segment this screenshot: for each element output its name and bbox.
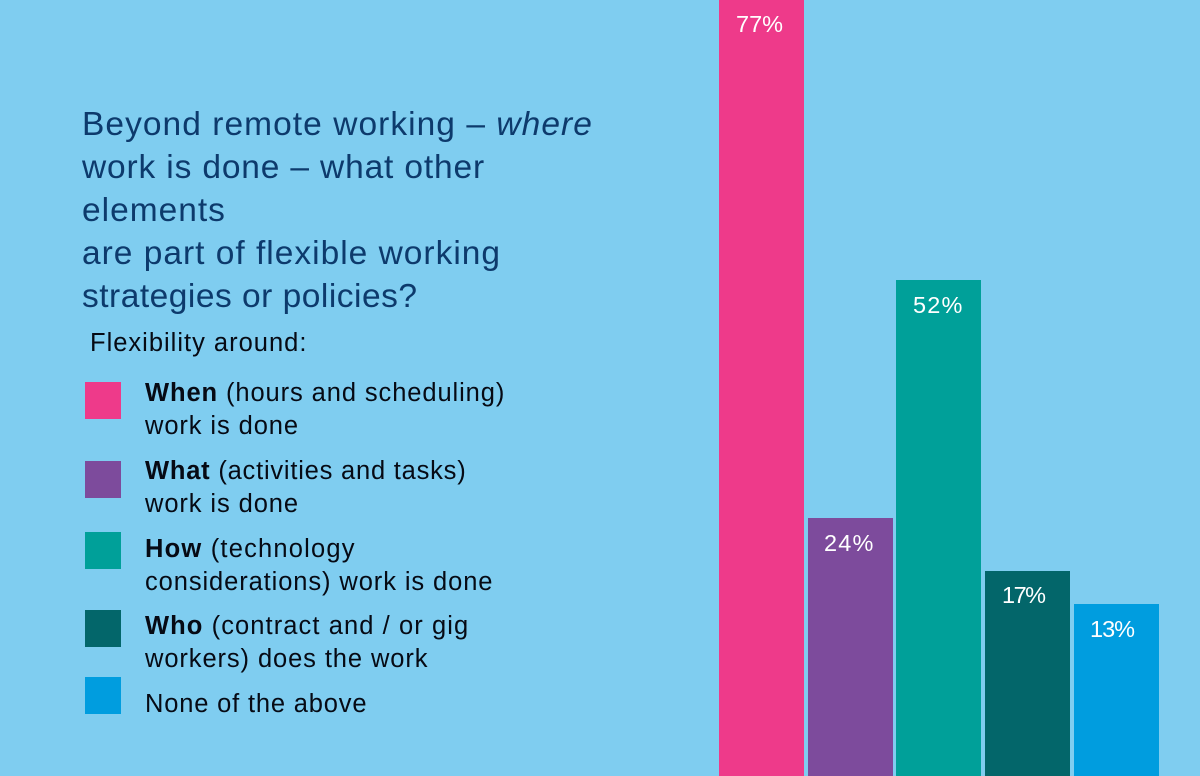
legend heading: Flexibility around: bbox=[90, 329, 307, 357]
bar: how 52%: 52% bbox=[913, 292, 964, 318]
bar: none 13%: 13% bbox=[1090, 616, 1134, 642]
legend item: how bbox=[85, 532, 493, 596]
bar: none 13% bbox=[1074, 604, 1159, 776]
legend item: how: considerations) work is done bbox=[145, 568, 493, 596]
legend item: how: How (technology bbox=[145, 535, 356, 563]
legend item: what: work is done bbox=[145, 490, 299, 518]
legend item: when bbox=[85, 379, 505, 440]
title: are part of flexible working bbox=[82, 235, 501, 272]
bar: who 17% bbox=[985, 571, 1070, 776]
bar: how 52% bbox=[896, 280, 981, 776]
legend item: none: None of the above bbox=[145, 690, 367, 718]
legend item: who bbox=[85, 610, 469, 673]
bar: when 77% bbox=[719, 0, 804, 776]
title: elements bbox=[82, 192, 226, 229]
bar chart bbox=[719, 0, 1159, 776]
legend item: what bbox=[85, 457, 466, 518]
legend item: what: What (activities and tasks) bbox=[145, 457, 466, 485]
legend item: when: When (hours and scheduling) bbox=[145, 379, 505, 407]
bar: who 17%: 17% bbox=[1002, 582, 1045, 608]
bar: what 24% bbox=[808, 518, 893, 776]
title: Beyond remote working – where bbox=[82, 106, 593, 143]
title: strategies or policies? bbox=[82, 278, 418, 315]
legend bbox=[85, 379, 505, 718]
legend item: when: work is done bbox=[145, 412, 299, 440]
legend item: who: Who (contract and / or gig bbox=[145, 612, 469, 640]
legend item: none bbox=[85, 677, 367, 718]
title bbox=[82, 106, 593, 315]
title: work is done – what other bbox=[82, 149, 485, 186]
legend item: who: workers) does the work bbox=[145, 645, 428, 673]
bar: when 77%: 77% bbox=[736, 11, 783, 37]
bar: what 24%: 24% bbox=[824, 530, 875, 556]
